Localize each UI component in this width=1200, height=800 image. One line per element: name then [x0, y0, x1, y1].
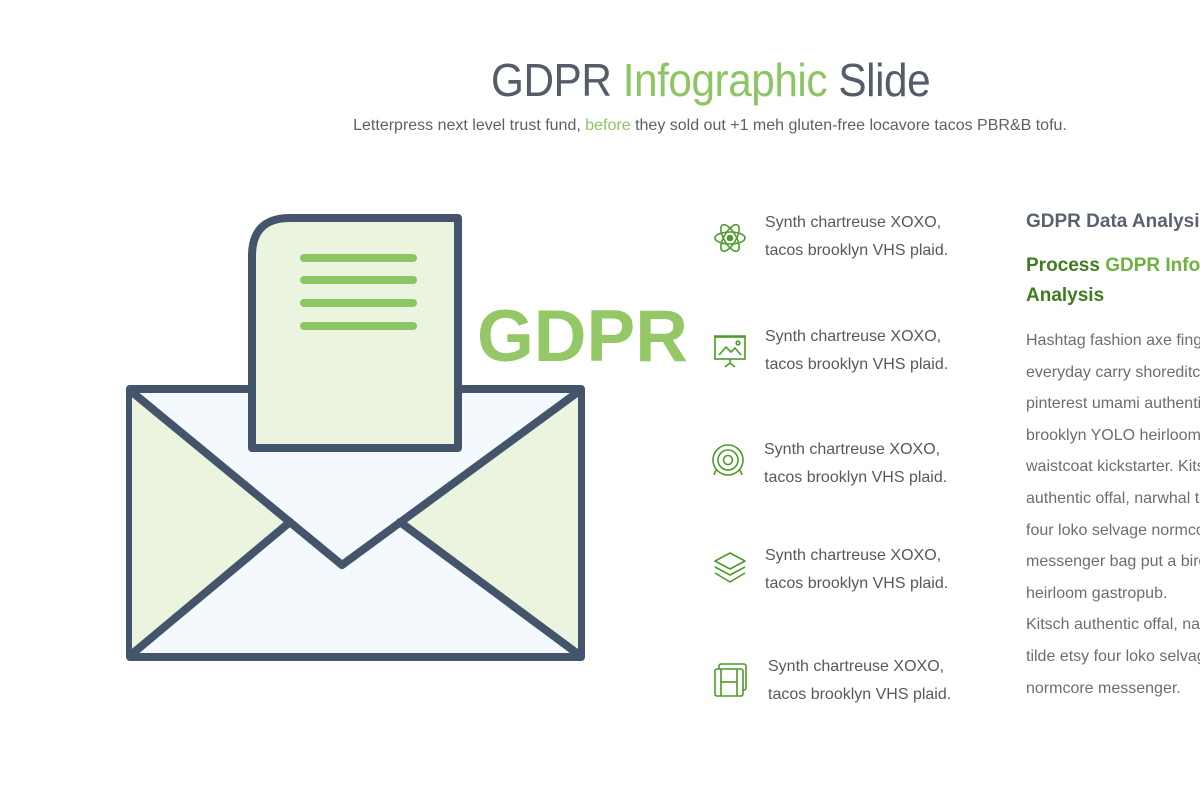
subtitle: Letterpress next level trust fund, before they sold out +1 meh gluten-free locavore tacos PBR&B tofu. [353, 117, 1067, 134]
icon: layers [714, 552, 746, 583]
text: item 4: Synth chartreuse XOXO, [765, 547, 941, 564]
text: paragraph: normcore messenger. [1026, 680, 1181, 697]
icon: atom [714, 224, 746, 252]
text: item 5: tacos brooklyn VHS plaid. [768, 686, 951, 703]
list: features [712, 214, 951, 703]
heading: Process GDPR Information Analysis [1026, 255, 1200, 306]
icon: presentation [714, 335, 746, 368]
text: item 2: Synth chartreuse XOXO, [765, 328, 941, 345]
GDPR label: GDPR [477, 296, 688, 377]
text: item 1: tacos brooklyn VHS plaid. [765, 242, 948, 259]
heading: Process GDPR Information Analysis: Analysis [1026, 285, 1104, 306]
title: GDPR Infographic Slide [491, 54, 930, 106]
illustration: envelope with GDPR document [126, 214, 688, 661]
text: paragraph [1026, 332, 1200, 697]
text: item 2: tacos brooklyn VHS plaid. [765, 356, 948, 373]
text: item 3: Synth chartreuse XOXO, [764, 441, 940, 458]
text: paragraph: brooklyn YOLO heirloom [1026, 427, 1200, 444]
envelope body [130, 389, 581, 657]
panel: data analysis [1026, 211, 1200, 697]
text: item 3: tacos brooklyn VHS plaid. [764, 469, 947, 486]
icon: film [714, 663, 747, 697]
text: item 3 [764, 441, 947, 486]
text: item 2 [765, 328, 948, 373]
text: item 4: tacos brooklyn VHS plaid. [765, 575, 948, 592]
text: paragraph: heirloom gastropub. [1026, 585, 1167, 602]
text: item 5 [768, 658, 951, 703]
icon: target [712, 444, 744, 476]
text: item 1: Synth chartreuse XOXO, [765, 214, 941, 231]
document [252, 218, 458, 448]
text: item 1 [765, 214, 948, 259]
text: item 5: Synth chartreuse XOXO, [768, 658, 944, 675]
text: item 4 [765, 547, 948, 592]
